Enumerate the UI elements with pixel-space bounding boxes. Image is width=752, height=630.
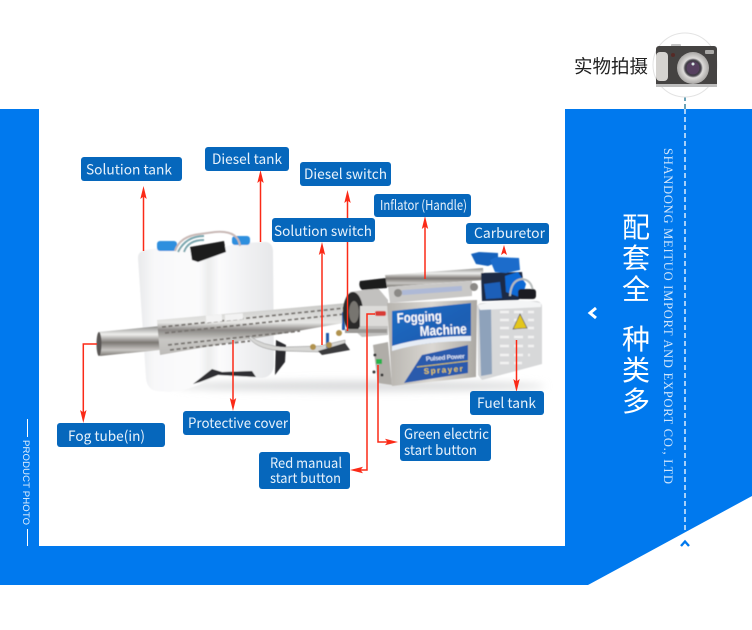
vertical company name: SHANDONG MEITUO IMPORT AND EXPORT CO., LTD [661,148,675,484]
vertical headline: 类 [622,355,650,386]
label: diesel tank: Diesel tank [212,149,282,169]
arrow: diesel switch [344,190,351,331]
label: green electric start button: Green electric [404,424,489,444]
label: red manual start button: start button [270,468,341,488]
arrow: carburetor [501,245,507,255]
product: fogging machine [343,252,542,386]
label: solution tank: Solution tank [86,160,172,180]
label: red manual start button: Red manual [270,453,342,473]
main case [387,300,477,386]
product: fogging machine: Sprayer [424,364,463,376]
engine [481,272,525,301]
vertical headline: 全 [622,274,650,305]
label: solution switch: Solution switch [274,221,372,241]
label: green electric start button [400,424,491,461]
label: fog tube [57,423,165,447]
left chevron icon [590,308,596,318]
up chevron icon [681,542,689,546]
arrow: fog tube [80,344,97,423]
vertical headline: 种 [622,324,650,355]
product: fogging machine: Machine [419,321,467,339]
arrow: red manual button [350,314,375,473]
product: fogging machine: Fogging [396,308,442,326]
arrow: diesel tank [257,170,264,242]
exhaust drum [346,288,388,337]
fuel tank [477,301,542,380]
product: fog tube [96,303,350,356]
label: inflator: Inflator (Handle) [380,194,467,214]
label: protective cover: Protective cover [188,413,289,433]
red button [375,311,386,316]
arrow: inflator [422,216,428,279]
arrow: fuel tank [513,340,520,392]
label: fog tube: Fog tube(in) [68,426,145,446]
side plate [373,342,392,385]
arrow: solution switch [319,242,325,345]
vertical headline: 多 [622,386,650,417]
label: red manual start button [259,452,350,489]
ground shadow [175,381,545,391]
label: carburetor: Carburetor [474,223,546,243]
dashed line [684,88,686,530]
vertical headline: 套 [622,243,650,274]
product: twin plastic tanks [138,232,286,392]
grip [359,278,387,290]
label: diesel switch: Diesel switch [304,164,387,184]
vertical headline [622,212,650,417]
handle [385,268,484,287]
green button [376,359,382,364]
left side caption: product photo: PRODUCT PHOTO [20,440,31,525]
left side caption: product photo [20,419,31,546]
arrow: protective cover [230,340,236,411]
arrow: solution tank [140,186,147,251]
vertical headline: 配 [622,212,650,243]
blue background band [0,109,752,585]
label: green electric start button: start button [404,440,477,460]
white photo panel [39,109,565,546]
icon: camera [653,33,717,97]
label: fuel tank [470,391,544,415]
caption: real photo: 实物拍摄 [574,56,648,77]
label: fuel tank: Fuel tank [477,393,536,413]
arrow: green electric button [378,365,398,445]
product: fogging machine: Pulsed Power [426,353,466,363]
